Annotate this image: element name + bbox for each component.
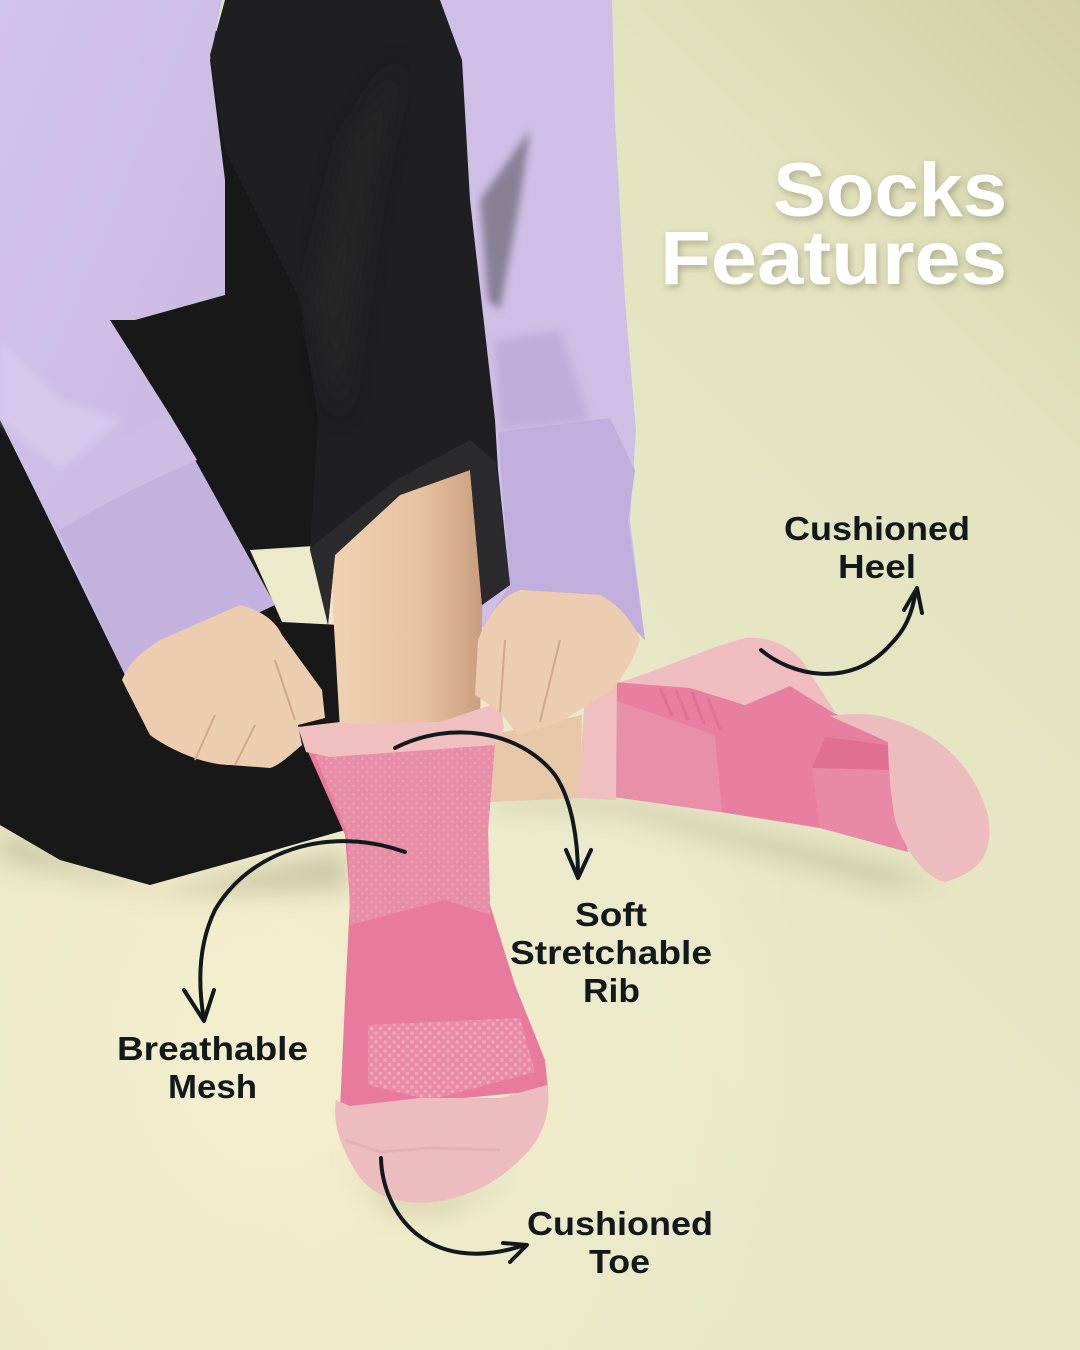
front sock: toe — [335, 1085, 549, 1203]
label: cushioned toe — [527, 1205, 713, 1280]
lilac sweater: right sleeve — [430, 0, 645, 640]
front sock: cuff — [298, 702, 504, 757]
label: cushioned heel — [784, 510, 970, 585]
back sock: heel patch — [812, 737, 890, 770]
right hand — [475, 590, 640, 735]
back sock: heel — [612, 638, 835, 712]
arrow: to cushioned toe — [381, 1158, 527, 1262]
sleeve cuff: right — [482, 418, 645, 640]
lilac sweater: torso and left sleeve — [0, 0, 275, 675]
title — [660, 148, 1007, 301]
arrow: to soft stretchable rib — [395, 732, 591, 878]
left hand — [122, 605, 325, 768]
bare ankle behind second sock — [490, 715, 582, 802]
back sock — [578, 638, 989, 882]
label: soft stretchable rib: Stretchable — [510, 934, 712, 971]
floor shadows — [0, 800, 940, 1212]
label: breathable mesh: Breathable — [117, 1030, 308, 1067]
back sock: rib stripes — [660, 688, 720, 730]
label: cushioned heel: Heel — [838, 548, 916, 585]
bare leg — [330, 420, 483, 730]
sleeve cuff: left — [42, 415, 275, 675]
back sock: cuff — [578, 684, 617, 800]
front sock: upper mesh panel — [315, 742, 495, 925]
back sock: upper mesh panel — [614, 700, 722, 812]
label: soft stretchable rib: Soft — [575, 896, 647, 933]
back sock: lower panel — [812, 768, 905, 850]
label: cushioned toe: Cushioned — [527, 1205, 713, 1242]
arrow: to cushioned heel — [761, 588, 922, 674]
label: soft stretchable rib: Rib — [583, 972, 640, 1009]
back sock: body — [612, 682, 908, 852]
title: Socks — [773, 148, 1007, 233]
front sock: body — [308, 742, 548, 1110]
front sock — [298, 702, 549, 1203]
label: cushioned heel: Cushioned — [784, 510, 970, 547]
label: breathable mesh: Mesh — [168, 1068, 257, 1105]
black trouser leg — [210, 0, 510, 625]
label: breathable mesh — [117, 1030, 308, 1105]
label: cushioned toe: Toe — [589, 1243, 650, 1280]
black trousers: body and thigh — [0, 30, 345, 885]
arrow: to breathable mesh — [184, 841, 405, 1021]
label: soft stretchable rib — [510, 896, 712, 1009]
title: Features — [660, 216, 1007, 301]
back sock: toe — [830, 714, 989, 882]
front sock: lower mesh panel — [368, 1018, 535, 1100]
